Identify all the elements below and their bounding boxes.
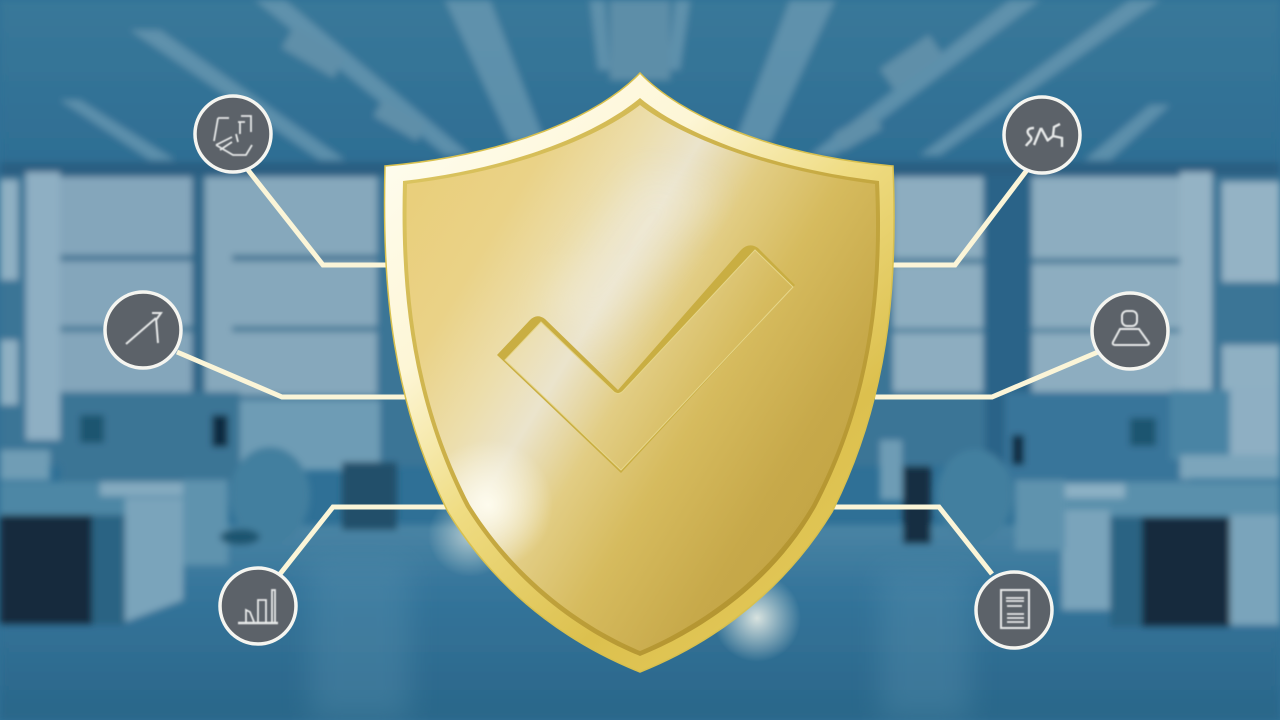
line: middle right: [875, 352, 1098, 397]
icon: bottom left, bar chart: [220, 568, 296, 644]
icon: top right, stretching figures: [1004, 97, 1080, 173]
icon: middle right, person: [1092, 293, 1168, 369]
desks right: [1005, 392, 1190, 482]
windows right: [893, 177, 983, 392]
shield face: [407, 105, 876, 651]
gold shield: [385, 73, 894, 672]
checkmark recess: [497, 245, 795, 473]
icon: top left, face scan: [195, 96, 271, 172]
line: bottom right: [830, 507, 992, 574]
line: top left: [248, 170, 390, 265]
wall band: [0, 162, 1280, 178]
shield inner groove: [403, 98, 880, 656]
icon: middle left, rising arrow: [105, 292, 181, 368]
connector lines: [177, 170, 1098, 574]
shield highlights: [423, 170, 720, 570]
icon: bottom right, document: [976, 572, 1052, 648]
desks left: [60, 392, 240, 482]
line: bottom left: [280, 507, 450, 574]
glow behind shield base: [428, 493, 801, 662]
line: middle left: [177, 352, 405, 397]
line: top right: [890, 170, 1027, 265]
floor: [0, 525, 1280, 720]
windows left: [0, 180, 18, 280]
shield outer rim: [385, 73, 894, 672]
